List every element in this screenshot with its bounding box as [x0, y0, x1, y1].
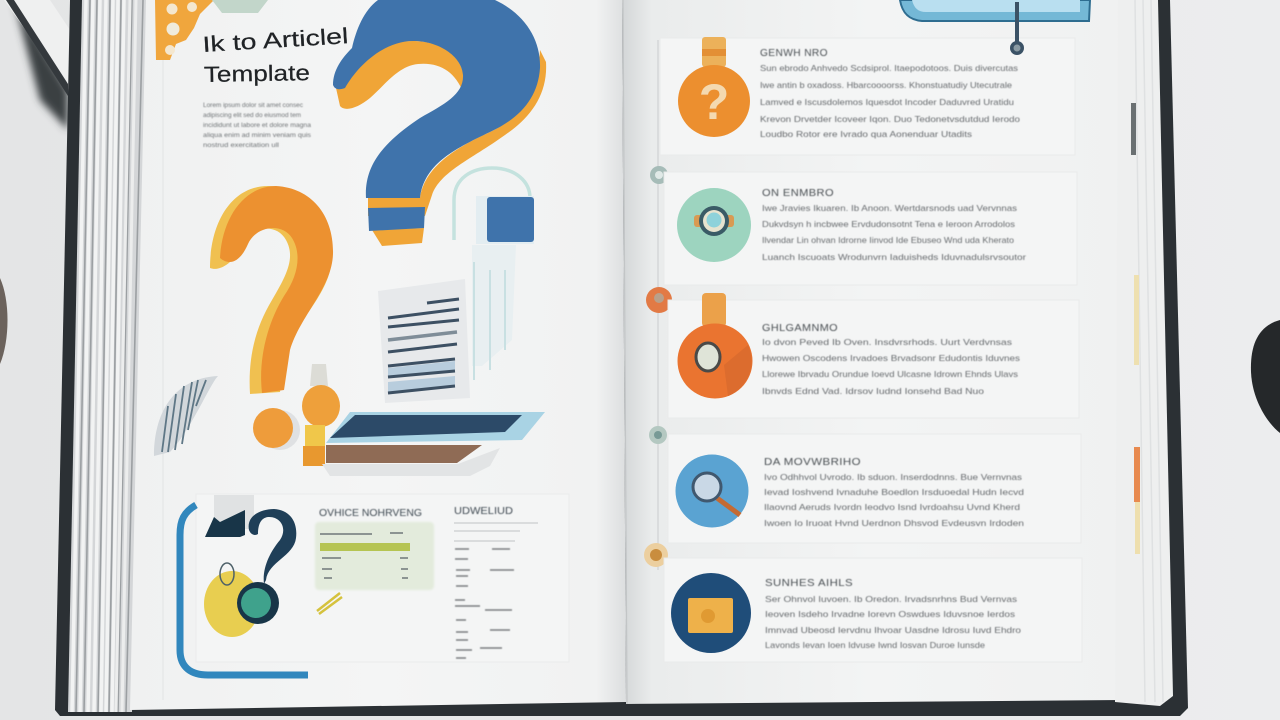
panel: right page steps: [644, 0, 1090, 662]
heading: DA MOVWBRIHO: [764, 456, 861, 468]
body text: Ilaovnd Aeruds Ivordn Ieodvo Isnd Ivrdoahsu Uvnd Kherd: [764, 502, 1020, 512]
body text: Luanch Iscuoats Wrodunvrn Iaduisheds Iduvnadulsrvsoutor: [762, 252, 1026, 262]
timeline line: [657, 40, 659, 570]
step 1: [660, 37, 1075, 155]
body text: Lamved e Iscusdolemos Iquesdot Incoder Daduvred Uratidu: [760, 97, 1014, 107]
body text: Dukvdsyn h incbwee Ervdudonsotnt Tena e Ieroon Arrodolos: [762, 219, 1015, 229]
intro text: Lorem ipsum dolor sit amet consec: [203, 103, 303, 109]
card: [664, 558, 1082, 662]
body text: Sun ebrodo Anhvedo Scdsiprol. Itaepodotoos. Duis divercutas: [760, 63, 1018, 73]
subheading: right column: UDWELIUD: [454, 505, 513, 517]
intro text: incididunt ut labore et dolore magna: [203, 123, 312, 129]
step 4: [668, 434, 1081, 543]
connector dot: amber: [644, 543, 668, 567]
body text: Ibnvds Ednd Vad. Idrsov Iudnd Ionsehd Bad Nuo: [762, 386, 984, 396]
title: [202, 23, 349, 87]
body text: Iwe antin b oxadoss. Hbarcoooorss. Khonstuatudiy Utecutrale: [760, 80, 1012, 90]
right page stack: [1115, 0, 1173, 706]
icon: orange lens: [678, 293, 752, 398]
page tabs: [1131, 103, 1140, 554]
heading: SUNHES AIHLS: [765, 577, 853, 589]
decorative honeycomb pattern: [155, 0, 268, 60]
connector dot: green: [650, 166, 668, 184]
connector dot: teal: [649, 426, 667, 444]
left page: [130, 0, 626, 710]
icon: large orange question mark: [210, 186, 333, 394]
body text: Hwowen Oscodens Irvadoes Brvadsonr Edudontis Iduvnes: [762, 353, 1020, 363]
icon: document: [378, 279, 470, 403]
body text: Ser Ohnvol Iuvoen. Ib Oredon. Irvadsnrhns Bud Vernvas: [765, 594, 1017, 604]
subheading: left column: OVHICE NOHRVENG: [319, 507, 422, 519]
body text: [762, 337, 1020, 396]
icon: striped shell: [154, 376, 218, 456]
icon: dark shape: [205, 510, 245, 537]
body text: Ivo Odhhvol Uvrodo. Ib sduon. Inserdodnns. Bue Vernvnas: [764, 472, 1022, 482]
icon: large blue question mark: [333, 0, 546, 246]
icon: orange question: [678, 37, 750, 137]
icon: pencil: [317, 593, 342, 614]
panel: left page: [154, 0, 569, 700]
list column: [454, 523, 538, 658]
page rule: [162, 60, 164, 700]
body text: [764, 472, 1024, 528]
card: [660, 38, 1075, 155]
heading: GENWH NRO: [760, 47, 828, 59]
intro text: [203, 103, 312, 149]
icon: dark question mark: [249, 509, 296, 584]
step 2: [664, 172, 1077, 285]
body text: Llorewe Ibrvadu Orundue Ioevd Ulcasne Idrown Ehnds Ulavs: [762, 369, 1018, 379]
left desk object: [0, 0, 70, 364]
blue corner bracket: [180, 505, 308, 675]
icon: orange dot and bottle: [253, 364, 340, 466]
intro text: adipiscing elit sed do eiusmod tem: [203, 113, 301, 119]
body text: Iwoen Io Iruoat Hvnd Uerdnon Dhsvod Evdeusvn Irdoden: [764, 518, 1024, 528]
intro text: nostrud exercitation ull: [203, 143, 279, 149]
body text: Ilvendar Lin ohvan Idrorne Iinvod Ide Ebuseo Wnd uda Kherato: [762, 235, 1014, 245]
left page stack: [68, 0, 150, 712]
icon: blue magnifier: [676, 454, 748, 528]
icon: green lens: [677, 188, 751, 262]
heading: ON ENMBRO: [762, 187, 834, 199]
icon: navy folder: [671, 573, 751, 653]
intro text: aliqua enim ad minim veniam quis: [203, 133, 311, 139]
right page: [622, 0, 1122, 704]
icon: open tablet: [322, 412, 545, 476]
right desk object: [1251, 320, 1280, 433]
icon: yellow magnifier: [204, 563, 279, 637]
panel: bottom card: [180, 494, 569, 675]
title: Template: [204, 60, 310, 87]
body text: Lavonds Ievan Ioen Idvuse Iwnd Iosvan Duroe Iunsde: [765, 640, 985, 650]
icon: hanging clip: [900, 0, 1090, 55]
grey square: [214, 495, 254, 529]
body text: Loudbo Rotor ere Ivrado qua Aonenduar Utadits: [760, 129, 972, 139]
gutter line: [623, 0, 627, 704]
heading: GHLGAMNMO: [762, 322, 838, 334]
card: [668, 434, 1081, 543]
step 3: [668, 293, 1079, 418]
card outline: [196, 494, 569, 662]
body text: Ieoven Isdeho Irvadne Iorevn Oswdues Iduvsnoe Ierdos: [765, 609, 1015, 619]
title: Ik to Articlel: [202, 23, 349, 57]
body text: Imnvad Ubeosd Iervdnu Ihvoar Uasdne Idrosu Iuvd Ehdro: [765, 625, 1021, 635]
connector dot: orange: [646, 287, 672, 313]
body text: [762, 203, 1026, 262]
body text: [765, 594, 1021, 650]
body text: Iwe Jravies Ikuaren. Ib Anoon. Wertdarsnods uad Vervnnas: [762, 203, 1017, 213]
card: [668, 300, 1079, 418]
body text: [760, 63, 1020, 139]
icon: padlock: [454, 168, 534, 380]
table panel: [315, 522, 434, 590]
icon: orange question: ?: [699, 74, 729, 130]
body text: Ievad Ioshvend Ivnaduhe Boedlon Irsduoedal Hudn Iecvd: [764, 487, 1024, 497]
body text: Io dvon Peved Ib Oven. Insdvrsrhods. Uurt Verdvnsas: [762, 337, 1012, 347]
step 5: [664, 558, 1082, 662]
body text: Krevon Drvetder Icoveer Iqon. Duo Tedonetvsdutdud Ierodo: [760, 114, 1020, 124]
card: [664, 172, 1077, 285]
